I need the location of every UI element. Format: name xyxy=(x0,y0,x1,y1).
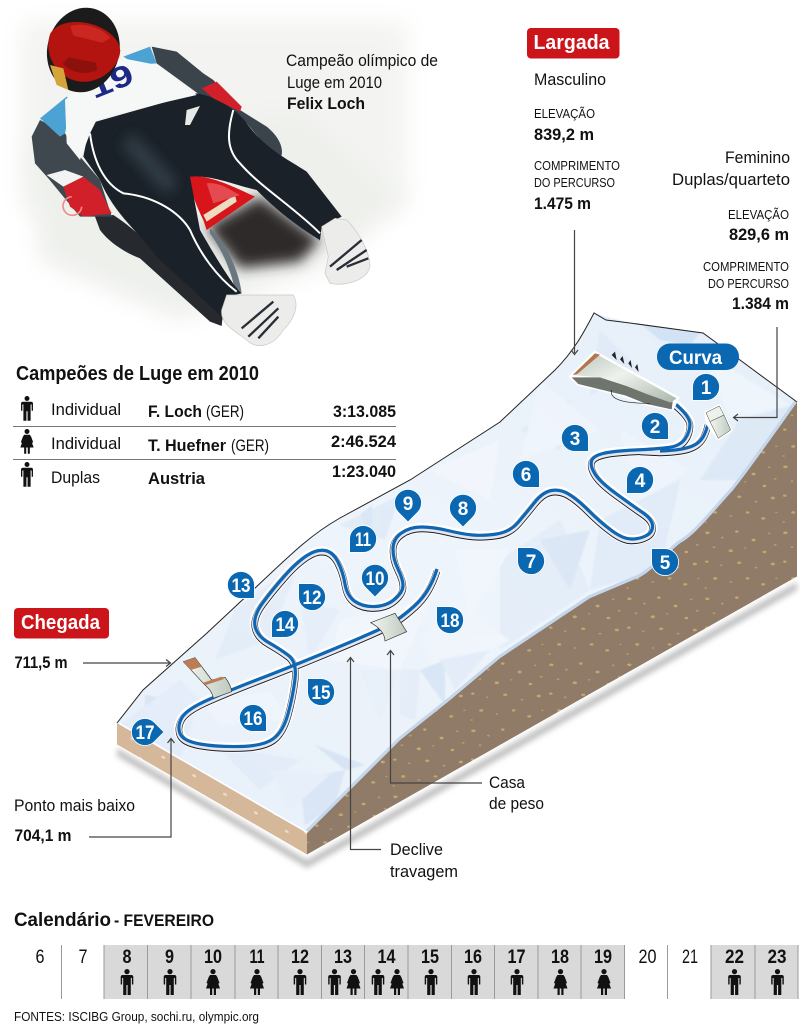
photo caption: Campeão olímpico de xyxy=(286,51,438,70)
helmet xyxy=(38,0,129,100)
calendar day numbers: 9 xyxy=(165,947,174,968)
arrow: women's start xyxy=(734,327,777,421)
panel: champions table: Austria xyxy=(148,469,206,488)
calendar heading: - FEVEREIRO xyxy=(114,911,214,930)
curve number markers: 10 xyxy=(366,569,384,590)
bib xyxy=(40,97,72,137)
callout: women's start xyxy=(672,148,790,313)
arrow: lowest point xyxy=(89,738,174,837)
competition day cells xyxy=(104,945,624,999)
callout: women's start: Duplas/quarteto xyxy=(672,170,790,189)
curve number markers: 3 xyxy=(570,429,580,450)
arrow: braking slope xyxy=(347,658,381,850)
panel: champions table: Individual xyxy=(51,434,121,453)
photo caption: Felix Loch xyxy=(287,94,365,113)
photo background ice xyxy=(22,22,407,320)
callout: Largada men's start: Masculino xyxy=(534,70,606,89)
callout: braking slope: Declive xyxy=(390,840,443,859)
calendar day numbers: 17 xyxy=(508,947,526,968)
callout: Largada men's start: DO PERCURSO xyxy=(534,175,615,190)
calendar day numbers: 6 xyxy=(36,947,44,968)
curve number markers: 6 xyxy=(521,465,531,486)
track: main sliding course xyxy=(179,402,708,749)
panel: champions table: (GER) xyxy=(231,436,269,455)
gloves xyxy=(202,82,242,112)
curve number markers: 7 xyxy=(526,552,536,573)
curve number markers xyxy=(131,368,725,746)
callout: lowest point: 704,1 m xyxy=(14,826,72,845)
callout: Chegada finish xyxy=(14,608,109,672)
panel: champions table: 2:46.524 xyxy=(331,432,397,451)
arrow: weigh house xyxy=(387,650,482,783)
callout: Largada men's start: 839,2 m xyxy=(534,125,594,144)
right arm xyxy=(152,47,282,161)
curve number markers: 13 xyxy=(232,576,250,597)
calendar day numbers xyxy=(36,947,786,968)
panel: champions table: T. Huefner xyxy=(148,436,226,455)
callout: weigh house: de peso xyxy=(489,794,544,813)
panel: champions table: F. Loch xyxy=(148,402,202,421)
building: finish house xyxy=(183,658,232,698)
callout: Largada men's start: Largada xyxy=(534,32,610,54)
callout: Chegada finish: 711,5 m xyxy=(14,653,68,672)
photo caption xyxy=(286,51,438,113)
calendar heading: Calendário xyxy=(14,910,111,931)
panel: champions table: Duplas xyxy=(51,468,100,487)
snow surface xyxy=(117,313,797,833)
arrow: finish xyxy=(83,660,170,666)
calendar day numbers: 20 xyxy=(638,947,656,968)
curve number markers: 12 xyxy=(302,588,322,609)
calendar day numbers: 15 xyxy=(421,947,439,968)
curve number markers: 17 xyxy=(136,723,154,744)
photo: luge champion Felix Loch xyxy=(22,0,407,346)
curve number markers: 1 xyxy=(701,378,712,399)
photo caption: Luge em 2010 xyxy=(287,73,382,92)
building: men's start house xyxy=(572,352,677,409)
calendar day numbers: 7 xyxy=(78,947,88,968)
calendar day numbers: 8 xyxy=(122,947,132,968)
boots xyxy=(322,218,370,284)
calendar athlete icons xyxy=(121,969,784,995)
label: Curva: Curva xyxy=(669,348,722,369)
calendar day numbers: 19 xyxy=(594,947,612,968)
callout: lowest point xyxy=(14,796,135,845)
ground side left xyxy=(117,723,307,855)
runner right xyxy=(257,187,320,242)
left arm xyxy=(32,120,112,217)
photo: luge champion Felix Loch: 19 xyxy=(84,58,138,106)
callout: weigh house xyxy=(489,773,544,813)
calendar day numbers: 14 xyxy=(378,947,396,968)
curve number markers: 5 xyxy=(660,553,671,574)
calendar day numbers: 18 xyxy=(551,947,569,968)
callout: lowest point: Ponto mais baixo xyxy=(14,796,135,815)
calendar day numbers: 12 xyxy=(291,947,309,968)
callout: braking slope xyxy=(390,840,458,881)
curve number markers: 14 xyxy=(276,615,295,636)
callout: women's start: Feminino xyxy=(725,148,790,167)
callout: Largada men's start xyxy=(527,28,620,213)
callout: women's start: 829,6 m xyxy=(729,225,789,244)
sled runner left xyxy=(95,215,223,326)
panel: champions table: Individual xyxy=(51,400,121,419)
curve number markers: 18 xyxy=(440,611,460,632)
panel: champions table: (GER) xyxy=(206,402,244,421)
callout: weigh house: Casa xyxy=(489,773,525,792)
calendar day numbers: 22 xyxy=(725,947,744,968)
arrow: men's start xyxy=(571,230,578,354)
panel: calendar xyxy=(14,910,798,999)
curve number markers: 16 xyxy=(244,709,262,730)
callout: Largada men's start: ELEVAÇÃO xyxy=(534,106,595,121)
callout: Chegada finish: Chegada xyxy=(21,612,101,634)
curve number markers: 11 xyxy=(355,530,371,551)
sled shadow xyxy=(207,197,320,268)
label: Curva xyxy=(657,344,739,370)
calendar day numbers: 10 xyxy=(204,947,222,968)
calendar day numbers: 21 xyxy=(682,947,698,968)
calendar day numbers: 11 xyxy=(250,947,265,968)
curve number markers: 4 xyxy=(635,471,646,492)
calendar day numbers: 13 xyxy=(334,947,352,968)
panel: champions table: 3:13.085 xyxy=(333,402,396,421)
table heading: Campeões de Luge em 2010 xyxy=(16,363,259,385)
slope shadow xyxy=(117,582,797,868)
calendar day numbers: 16 xyxy=(464,947,482,968)
suit xyxy=(83,93,342,317)
callout: women's start: 1.384 m xyxy=(732,294,789,313)
calendar day numbers: 23 xyxy=(768,947,786,968)
callout: women's start: ELEVAÇÃO xyxy=(728,207,789,222)
sources: FONTES: ISCIBG Group, sochi.ru, olympic.org xyxy=(14,1009,259,1024)
curve number markers: 9 xyxy=(403,494,413,515)
building: women's start house xyxy=(706,406,731,438)
curve number markers: 15 xyxy=(312,683,331,704)
callout: braking slope: travagem xyxy=(390,862,458,881)
illustration: track on snowy slope xyxy=(117,313,797,868)
panel: champions table: 1:23.040 xyxy=(332,462,396,481)
building: weigh house xyxy=(371,613,407,641)
calendar heading xyxy=(14,910,214,931)
curve number markers: 2 xyxy=(650,417,660,438)
sled body xyxy=(188,176,255,230)
panel: champions table xyxy=(13,363,397,488)
ground side right xyxy=(307,402,797,855)
callout: women's start: COMPRIMENTO xyxy=(703,259,789,274)
callout: Largada men's start: COMPRIMENTO xyxy=(534,158,620,173)
callout: Largada men's start: 1.475 m xyxy=(534,194,591,213)
curve number markers: 8 xyxy=(458,499,468,520)
